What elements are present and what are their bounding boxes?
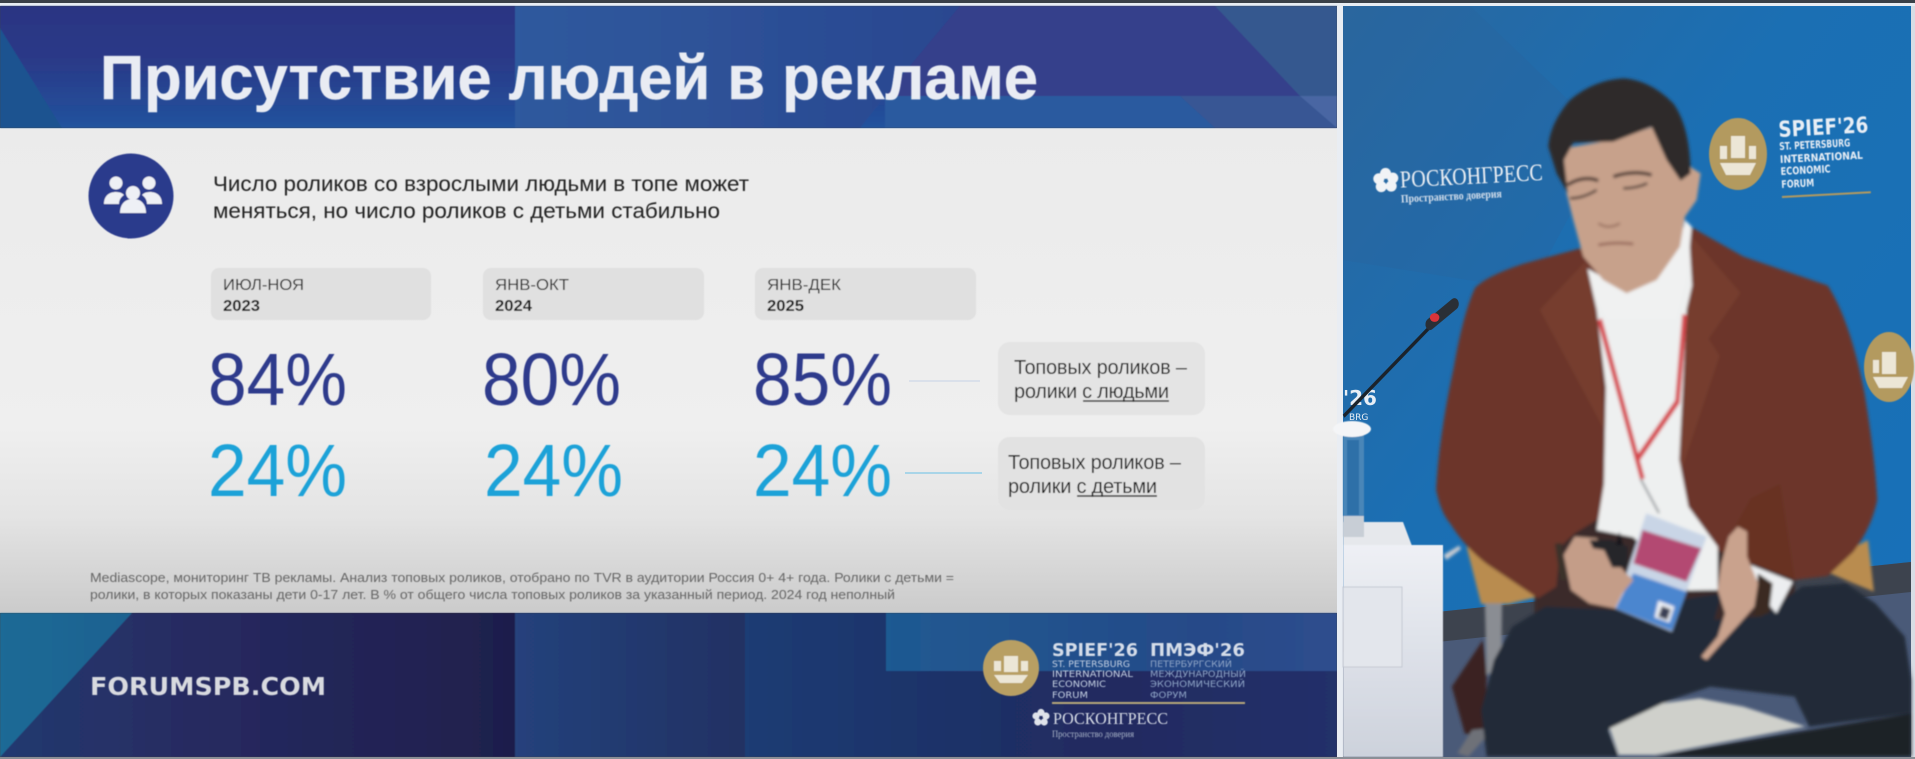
left hand with remote <box>1558 532 1633 608</box>
logo: forum on footer <box>983 640 1246 739</box>
backdrop text behind microphone: '26 <box>1343 386 1377 410</box>
forum name, russian: ПЕТЕРБУРГСКИЙ <box>1150 658 1232 670</box>
table <box>1343 522 1443 757</box>
forum name, english: SPIEF'26 <box>1052 640 1138 661</box>
panel: footer banner <box>0 613 1337 757</box>
forum name: FORUM <box>1781 177 1815 191</box>
forum name, english: ST. PETERSBURG <box>1052 660 1130 670</box>
chair <box>1443 540 1874 757</box>
percentages: with children: 24% <box>484 429 623 512</box>
foreground dark bar <box>1652 713 1911 757</box>
panel: slide <box>0 6 1337 757</box>
logo: roscongress on footer: Пространство доверия <box>1052 729 1134 739</box>
percentages: with people: 80% <box>482 338 621 421</box>
period pill: 2025: ЯНВ-ДЕК <box>767 277 842 294</box>
forum name: INTERNATIONAL <box>1780 150 1863 166</box>
panel: speaker video <box>1333 6 1915 759</box>
logo: roscongress on footer <box>1032 709 1168 739</box>
period pill: 2024 <box>483 268 704 320</box>
jacket <box>1436 227 1877 598</box>
lanyard <box>1600 315 1685 513</box>
connector: with children <box>905 472 982 474</box>
logo: roscongress on footer: РОСКОНГРЕСС <box>1053 709 1168 728</box>
forum name, russian <box>1150 640 1246 701</box>
legend: with people: Топовых роликов – <box>1014 357 1188 379</box>
torso shadow under jacket <box>1534 518 1795 624</box>
backdrop text behind microphone <box>1343 386 1377 423</box>
backdrop wall <box>1337 6 1915 759</box>
footnote: Mediascope, мониторинг ТВ рекламы. Анализ топовых роликов, отобрано по TVR в аудитории Россия 0+ 4+ года. Ролики с детьми = <box>90 570 954 585</box>
forum name: ST. PETERSBURG <box>1779 137 1851 153</box>
intro text <box>213 173 749 223</box>
right hand with watch <box>1701 527 1793 660</box>
footnote: ролики, в которых показаны дети 0-17 лет. В % от общего числа топовых роликов за указанный период. 2024 год неполный <box>90 587 895 602</box>
period pill: 2024: ЯНВ-ОКТ <box>495 277 569 294</box>
microphone <box>1344 304 1454 416</box>
icon: second gold emblem <box>1864 332 1914 402</box>
percentages: with people <box>208 338 892 421</box>
head <box>1548 78 1701 320</box>
panel: header banner <box>0 6 1337 128</box>
bottom edge strip <box>0 757 1915 759</box>
top edge strip <box>0 0 1915 6</box>
forum name, english: FORUM <box>1052 691 1088 701</box>
forum name, russian: ФОРУМ <box>1150 691 1187 701</box>
forum name, english: INTERNATIONAL <box>1052 670 1133 680</box>
icon: gold ship emblem <box>1709 118 1767 190</box>
period pill: 2025 <box>755 268 976 320</box>
period pill: 2023 <box>211 268 431 320</box>
website: FORUMSPB.COM <box>90 672 326 701</box>
intro text: меняться, но число роликов с детьми стабильно <box>213 200 720 223</box>
forum name, russian: ПМЭФ'26 <box>1150 640 1245 661</box>
jeans <box>1481 583 1911 757</box>
percentages: with children <box>208 429 892 512</box>
chair seat <box>1610 698 1806 755</box>
water glass <box>1333 421 1371 537</box>
shirt <box>1588 223 1718 590</box>
forum name: ECONOMIC <box>1780 163 1831 178</box>
forum name: SPIEF'26 <box>1778 113 1869 143</box>
legend: with children: Топовых роликов – <box>1008 452 1182 474</box>
logo: roscongress on backdrop: РОСКОНГРЕСС <box>1399 160 1543 194</box>
period pill: 2024: 2024 <box>495 298 532 315</box>
backdrop text behind microphone: BRG <box>1349 413 1368 423</box>
title: Присутствие людей в рекламе <box>100 44 1038 113</box>
intro text: Число роликов со взрослыми людьми в топе может <box>213 173 749 196</box>
legend: with people <box>998 342 1205 415</box>
icon: gold ship emblem <box>983 640 1039 696</box>
period pill: 2025: 2025 <box>767 298 804 315</box>
forum name <box>1778 113 1872 197</box>
percentages: with people: 84% <box>208 338 347 421</box>
legend: with children: ролики с детьми <box>1008 476 1157 498</box>
footnote <box>90 570 954 602</box>
forum name, english <box>1052 640 1138 701</box>
period pill: 2023: ИЮЛ-НОЯ <box>223 277 304 294</box>
percentages: with children: 24% <box>753 429 892 512</box>
logo: spief on backdrop <box>1709 113 1872 197</box>
period pill: 2023: 2023 <box>223 298 260 315</box>
logo: roscongress on backdrop <box>1373 160 1544 207</box>
connector: with people <box>909 380 980 382</box>
forum name, english: ECONOMIC <box>1052 680 1106 690</box>
icon: people in circle <box>88 154 174 238</box>
percentages: with people: 85% <box>753 338 892 421</box>
forum name, russian: ЭКОНОМИЧЕСКИЙ <box>1150 678 1245 690</box>
logo: roscongress on backdrop: Пространство доверия <box>1401 186 1503 206</box>
speaker <box>1436 78 1911 757</box>
slide background <box>0 128 1337 613</box>
legend: with people: ролики с людьми <box>1014 381 1169 403</box>
legend: with children <box>998 437 1205 510</box>
percentages: with children: 24% <box>208 429 347 512</box>
forum name, russian: МЕЖДУНАРОДНЫЙ <box>1150 668 1246 680</box>
badge <box>1615 513 1707 632</box>
